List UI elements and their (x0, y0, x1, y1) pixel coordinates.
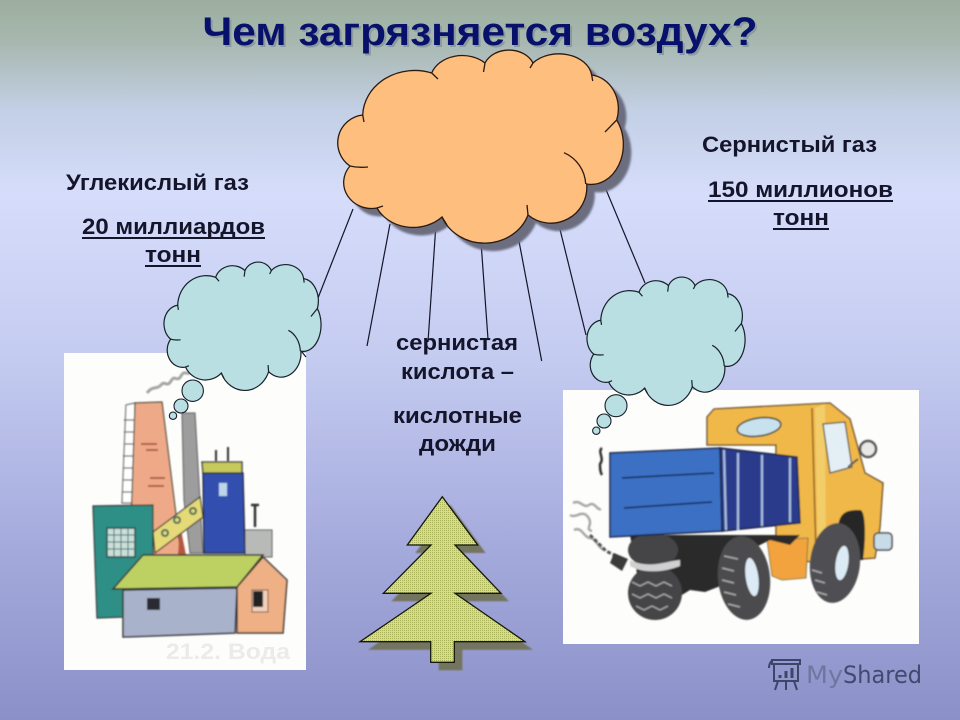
grey box (245, 530, 272, 557)
label: sulphurous acid, acid rain: кислота – (401, 359, 514, 384)
cloud shadow (346, 58, 631, 251)
icon: presentation board (769, 660, 800, 690)
smoke from factory (147, 372, 191, 393)
main cloud: orange (338, 50, 631, 251)
middle wheel (714, 534, 774, 622)
label: sulphur dioxide: тонн (773, 205, 829, 230)
green roof (113, 555, 263, 589)
exhaust smoke (570, 502, 604, 550)
green building (93, 505, 153, 618)
factory ladder (122, 403, 135, 503)
rear wheels (628, 533, 678, 567)
factory chimney (130, 402, 181, 555)
thin grey chimney (182, 413, 203, 553)
label: sulphurous acid, acid rain (393, 330, 522, 456)
label: sulphur dioxide: 150 миллионов (708, 177, 893, 202)
truck bed (610, 448, 722, 537)
label: carbon dioxide (66, 170, 265, 267)
label: sulphurous acid, acid rain: сернистая (396, 330, 518, 355)
title: Чем загрязняется воздух? (202, 10, 758, 54)
headlight (874, 533, 892, 550)
front wheel (806, 521, 864, 605)
gable (237, 557, 287, 633)
label: sulphur dioxide (702, 132, 893, 230)
truck cab (707, 403, 883, 562)
thought cloud: left (164, 262, 321, 419)
icon: fir tree (360, 497, 533, 670)
wheel arch (835, 510, 865, 560)
faint printed text on factory: 21.2. Вода (166, 639, 291, 664)
gray wall (123, 588, 237, 637)
label: sulphur dioxide: Сернистый газ (702, 132, 877, 157)
label: sulphurous acid, acid rain: кислотные (393, 403, 522, 428)
label: sulphurous acid, acid rain: дожди (419, 431, 496, 456)
blue tower (203, 473, 245, 553)
logo: MyShared (769, 660, 922, 690)
label: carbon dioxide: Углекислый газ (66, 170, 249, 195)
logo: MyShared: My (806, 661, 843, 689)
label: carbon dioxide: 20 миллиардов (82, 214, 265, 239)
thought cloud: right (587, 277, 745, 434)
illustration: factory (64, 353, 306, 670)
illustration: truck (563, 390, 919, 644)
bumper blob (767, 538, 808, 580)
dark chassis (630, 535, 800, 598)
logo: MyShared: Shared (843, 661, 922, 689)
conveyor (153, 497, 203, 553)
label: carbon dioxide: тонн (145, 242, 201, 267)
title: Чем загрязняется воздух? (204, 12, 760, 56)
connector lines (302, 180, 645, 361)
